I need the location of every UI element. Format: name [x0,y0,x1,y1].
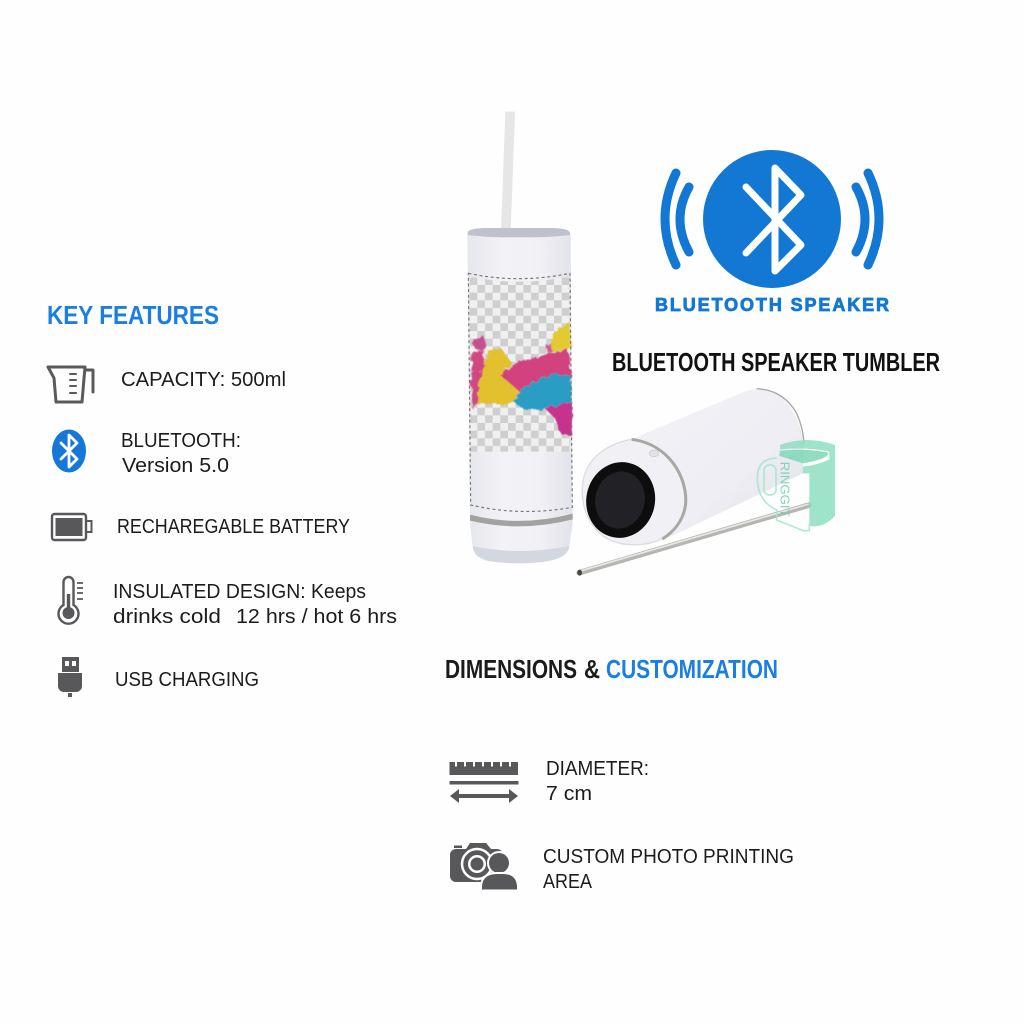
text: bluetooth version: Version 5.0 [122,455,229,477]
text: diameter: DIAMETER: [546,758,649,780]
watermark mug [757,440,835,531]
straw [501,112,515,232]
logo: bluetooth speaker [655,150,889,315]
icon: measuring jug [48,367,93,402]
paint splash [472,322,572,436]
base shading [473,546,569,563]
heading: dimensions and customization: CUSTOMIZATION [606,654,778,684]
icon: usb plug [58,657,82,697]
heading: dimensions and customization: DIMENSIONS [445,654,577,684]
watermark mug: RINGGIT [778,462,792,517]
text: custom photo printing: AREA [543,871,593,893]
text: bluetooth version [121,430,241,477]
text: capacity: CAPACITY: 500ml [121,369,286,391]
speaker cap [582,439,685,545]
icon: thermometer [58,577,83,624]
text: insulated design: INSULATED DESIGN: Keeps [113,581,366,603]
icon: bluetooth badge [52,430,86,472]
icon: bluetooth rune [746,168,801,271]
photo: tumbler lying on side [577,389,835,576]
checkerboard print area [469,277,570,452]
icon: sound waves [665,173,879,265]
text: bluetooth version: BLUETOOTH: [121,430,241,452]
icon: camera with person [450,843,518,892]
text: diameter: 7 cm [546,783,592,805]
icon: ruler and arrow [450,762,518,803]
dashed print outline [468,273,572,511]
text: insulated design: drinks cold [113,606,221,628]
text: battery: RECHAREGABLE BATTERY [117,516,350,538]
text: diameter [546,758,649,805]
text: usb charging: USB CHARGING [115,669,259,691]
feature list [48,367,397,697]
logo wordmark: BLUETOOTH SPEAKER [655,295,889,315]
speaker grille [579,456,662,544]
metal band [470,514,573,526]
lid [468,228,570,237]
heading: dimensions and customization: & [584,654,600,684]
heading: key features: KEY FEATURES [47,300,219,330]
text: custom photo printing [543,846,794,893]
text: custom photo printing: CUSTOM PHOTO PRINTING [543,846,794,868]
photo: upright tumbler with straw [467,112,573,563]
text: insulated design [113,581,397,628]
cap button [649,450,659,457]
text: insulated design: 12 hrs / hot 6 hrs [236,606,397,628]
cylinder body [632,389,804,539]
icon: battery [52,514,92,540]
tumbler body [467,235,573,563]
metal band [632,439,686,539]
far rim [757,389,804,443]
metal straw [579,505,809,573]
icon: bluetooth circle [703,150,841,288]
heading: dimensions and customization [445,654,778,684]
